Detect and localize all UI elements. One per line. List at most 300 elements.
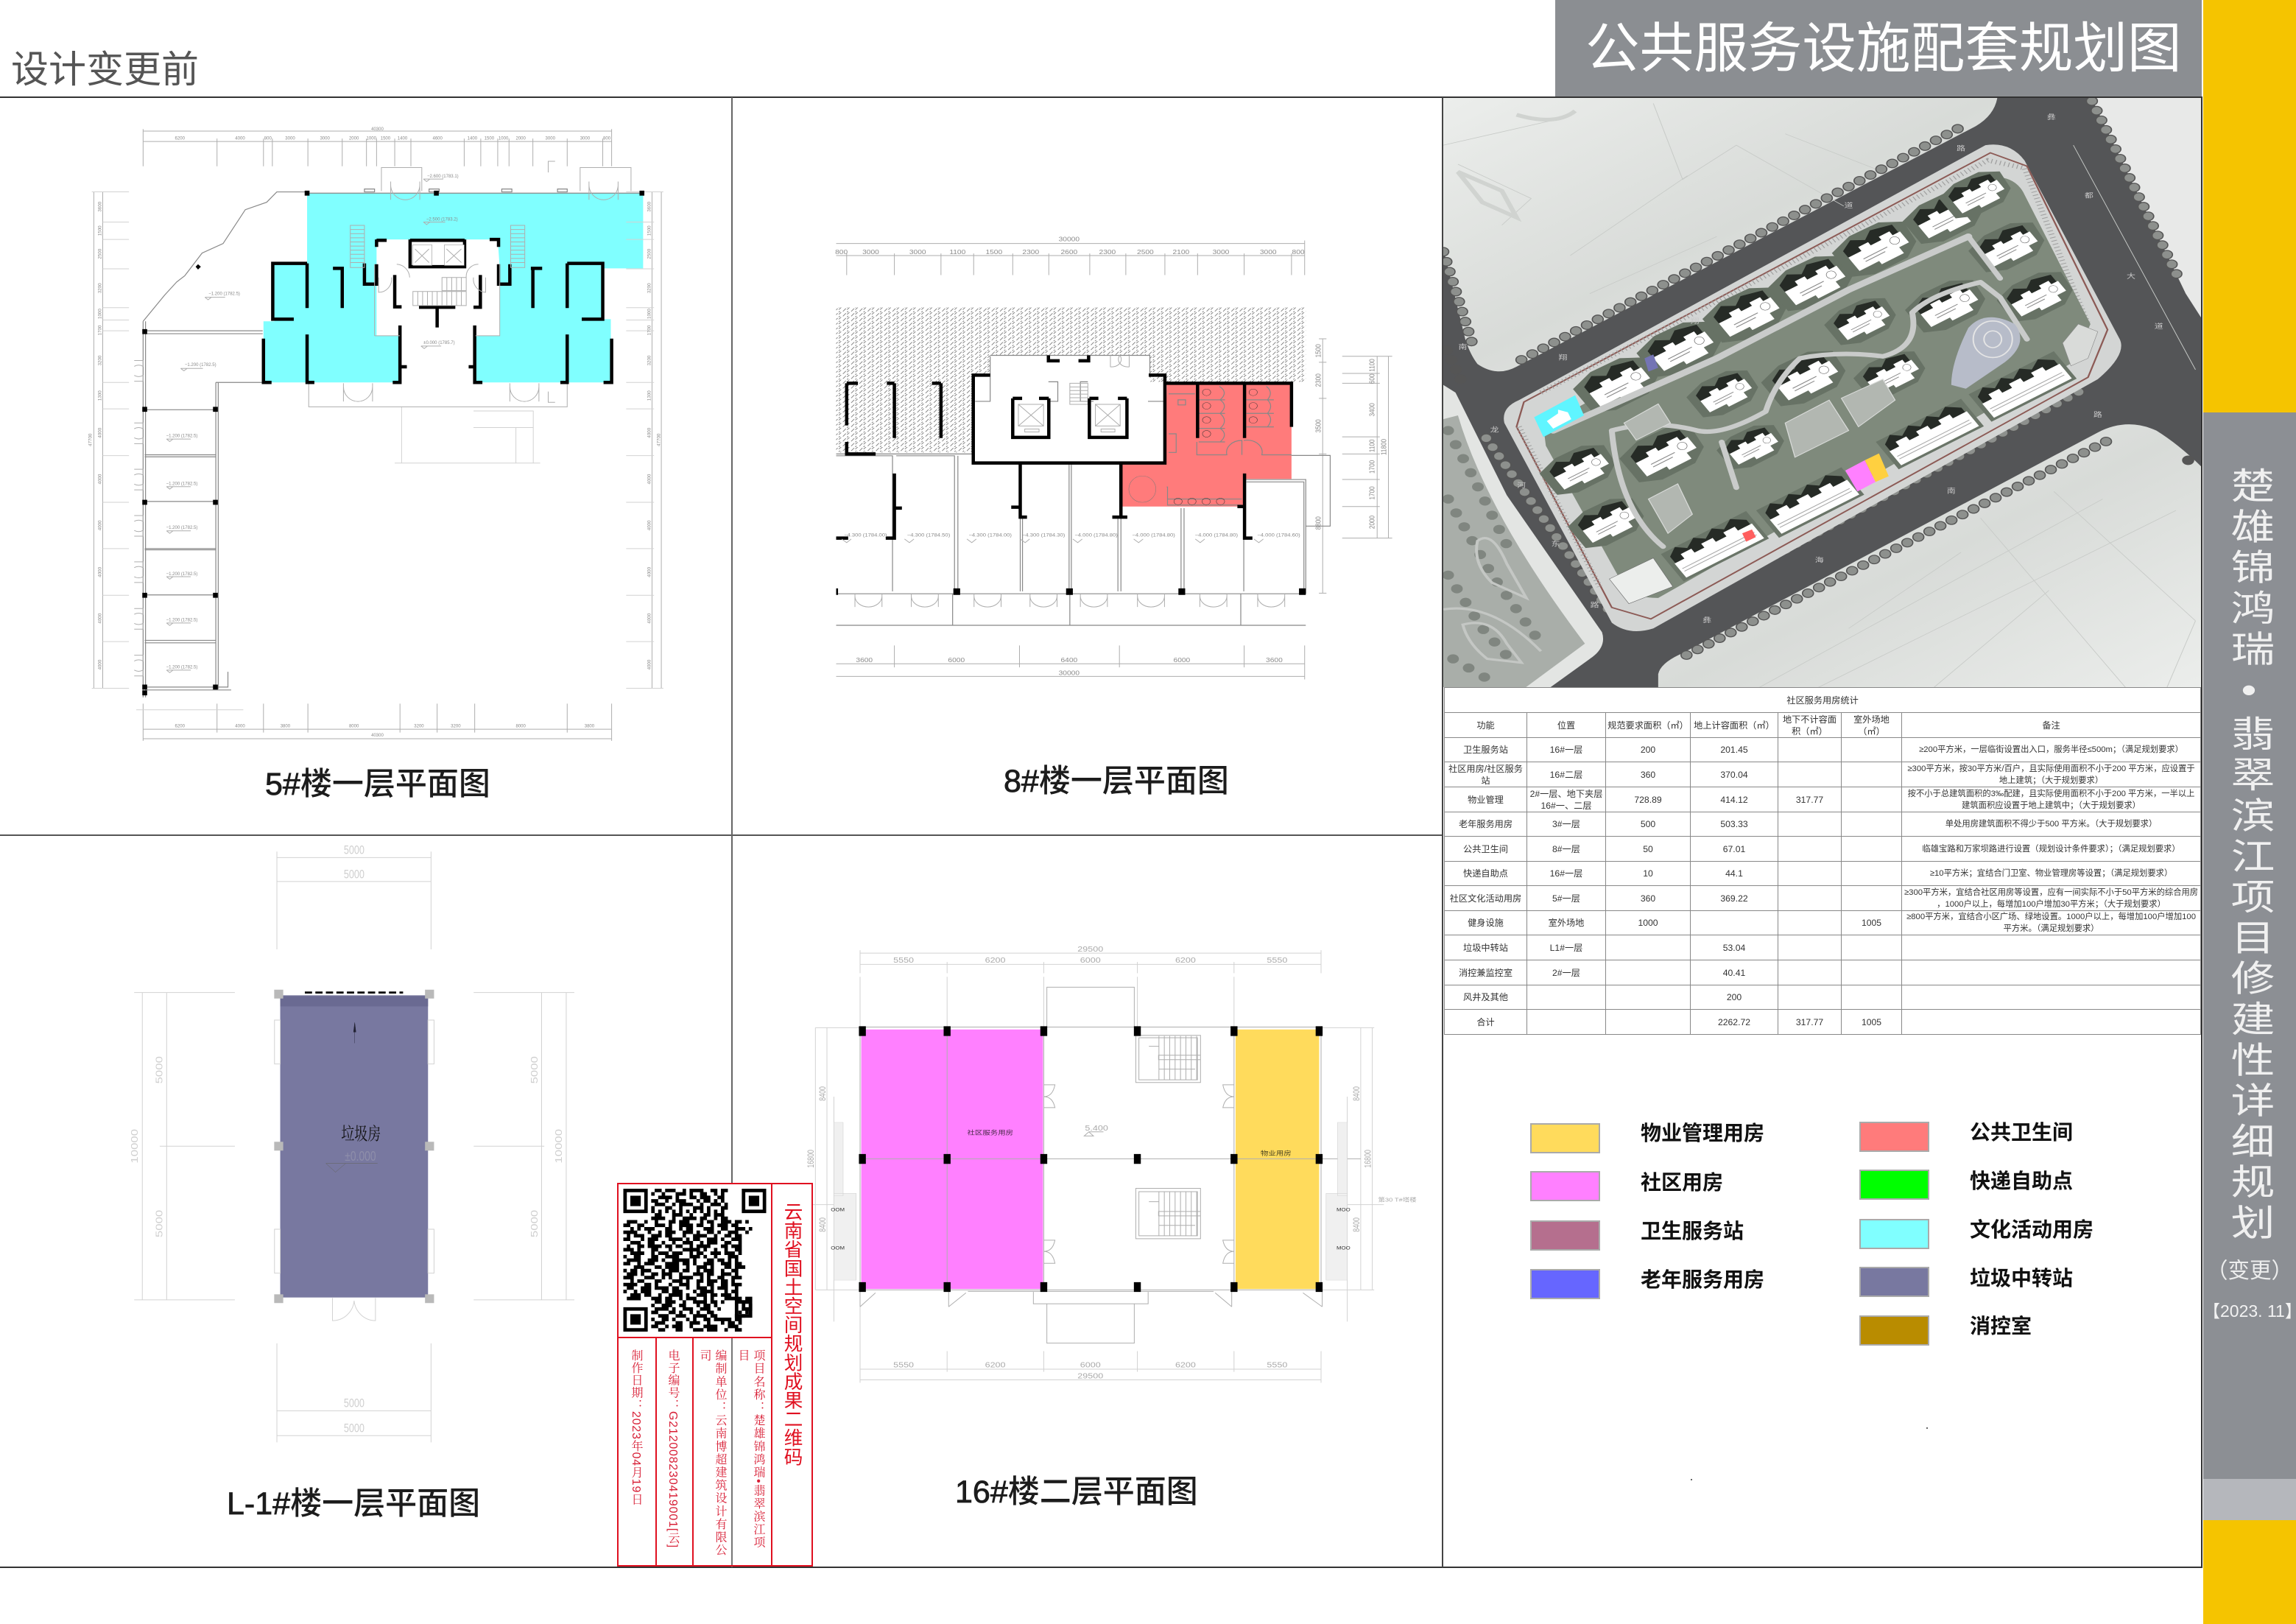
elevation labels: −1.200 (1782.5) xyxy=(166,665,197,670)
dimensions: 2100 xyxy=(1173,249,1189,256)
caption: building 5: 5#楼一层平面图 xyxy=(265,767,490,802)
dimensions: 1300 xyxy=(647,390,652,401)
dimensions: 2000 xyxy=(1368,516,1376,529)
table: community service room statistics: 8#一层 xyxy=(1552,844,1580,854)
table: community service room statistics: 500 xyxy=(1641,819,1655,829)
dimensions: 6000 xyxy=(1080,957,1101,965)
hatched area xyxy=(837,307,1306,452)
dimensions: 800 xyxy=(1292,249,1305,256)
dimensions: 3200 xyxy=(647,283,652,293)
room labels xyxy=(967,1129,1292,1156)
elevation labels: −1.200 (1782.5) xyxy=(166,572,197,577)
swatch: culture rooms xyxy=(1859,1219,1929,1249)
dimensions xyxy=(835,236,1392,680)
QR code xyxy=(623,1189,766,1332)
caption: building 16: 16#楼二层平面图 xyxy=(955,1474,1198,1510)
dimensions: 3800 xyxy=(585,723,595,728)
dimension lines: 5000 xyxy=(530,1056,540,1083)
dimension lines: 5000 xyxy=(155,1056,165,1083)
table: community service room statistics: 44.1 xyxy=(1725,868,1743,879)
dimensions: 600 xyxy=(1368,373,1376,384)
dimensions: 4000 xyxy=(97,613,102,624)
table: community service room statistics: 2#一层 xyxy=(1552,968,1580,978)
dimensions: 2600 xyxy=(1060,249,1077,256)
dimensions: 8000 xyxy=(349,723,359,728)
dimensions: 5550 xyxy=(893,957,914,965)
dimension lines: 5000 xyxy=(344,1397,365,1410)
table: community service room statistics: 1005 xyxy=(1862,1016,1881,1027)
dimensions: 3500 xyxy=(1314,419,1323,432)
elevation labels xyxy=(842,533,1300,543)
outlines, stairs, doors: MOO xyxy=(1337,1208,1351,1212)
table: community service room statistics: 备注 xyxy=(2042,720,2060,731)
dimensions: 3200 xyxy=(97,355,102,365)
dimensions: 800 xyxy=(835,249,848,256)
dimensions xyxy=(807,946,1417,1383)
elevation labels: −2.500 (1783.2) xyxy=(426,217,458,222)
road name labels: 彝 xyxy=(2047,113,2056,122)
dimensions: 1700 xyxy=(1368,486,1376,499)
central plaza xyxy=(1951,317,2021,389)
site block xyxy=(1504,144,2121,631)
table: community service room statistics: 50 xyxy=(1643,844,1653,854)
panel: building 16 second floor plan xyxy=(807,946,1417,1510)
compiling unit: 编制单位：云南博超建筑设计有限公司 xyxy=(698,1349,726,1557)
road name labels: 翔 xyxy=(1691,317,1700,326)
elevation labels: −4.000 (1784.60) xyxy=(1257,533,1300,538)
table: community service room statistics: 合计 xyxy=(1476,1016,1495,1027)
elevation labels: −1.200 (1782.5) xyxy=(208,291,240,296)
table: community service room statistics: 369.22 xyxy=(1720,893,1748,903)
table: community service room statistics: 370.04 xyxy=(1720,769,1748,779)
table: community service room statistics: ≥800平方米，宜结合小区广场、绿地设置。1000户以上，每增加100户增加100 xyxy=(1906,913,2196,921)
title banner xyxy=(1555,0,2202,96)
label: health station: 卫生服务站 xyxy=(1641,1220,1744,1242)
label: property management: 物业管理用房 xyxy=(1641,1122,1764,1145)
drawing: building 5 plan xyxy=(88,127,663,741)
cyan culture activity rooms xyxy=(264,193,643,382)
elevation labels: −4.000 (1784.80) xyxy=(1132,533,1175,538)
swatch: garbage transfer xyxy=(1859,1267,1929,1297)
table: community service room statistics: 积（㎡） xyxy=(1792,726,1828,737)
table: community service room statistics: （㎡） xyxy=(1858,726,1885,737)
room labels: 物业用房 xyxy=(1261,1150,1292,1156)
elevation labels xyxy=(166,174,459,672)
dimensions: 6200 xyxy=(985,957,1006,965)
table: community service room statistics: 站 xyxy=(1481,775,1490,785)
dimensions: 3000 xyxy=(1213,249,1229,256)
outlines, stairs, doors: OOM xyxy=(831,1246,845,1251)
table: community service room statistics: 快递自助点 xyxy=(1463,868,1508,879)
table: community service room statistics: 平方米。（满足规划要求） xyxy=(2004,924,2099,933)
caption: L-1: L-1#楼一层平面图 xyxy=(227,1486,480,1522)
thin outlines and shops wing xyxy=(134,161,643,710)
production date: 制作日期：2023年04月19日 xyxy=(630,1349,642,1505)
outlines, stairs, doors: 5.400 xyxy=(1085,1125,1108,1133)
label: elderly services: 老年服务用房 xyxy=(1641,1268,1764,1291)
table: community service room statistics: 53.04 xyxy=(1723,943,1745,953)
room labels: 社区服务用房 xyxy=(967,1129,1013,1136)
table: community service room statistics: 风井及其他 xyxy=(1463,992,1508,1002)
dimensions: 3200 xyxy=(414,723,424,728)
dimensions: 3000 xyxy=(546,136,556,141)
dimensions: 11800 xyxy=(1380,439,1388,455)
caption: building 8: 8#楼一层平面图 xyxy=(1004,764,1229,799)
dimensions: 8400 xyxy=(819,1086,828,1101)
roads xyxy=(1443,96,2209,692)
dimension lines xyxy=(130,844,574,1442)
legend xyxy=(1530,1121,2093,1346)
elevation labels: −1.200 (1782.5) xyxy=(166,525,197,530)
dimensions: 2500 xyxy=(1137,249,1154,256)
table: community service room statistics: 200 xyxy=(1641,745,1655,755)
label: parcel point: 快递自助点 xyxy=(1970,1170,2073,1192)
table: community service room statistics: 16#一层 xyxy=(1550,745,1582,755)
dimensions: 1100 xyxy=(1368,440,1376,452)
central terraces xyxy=(1624,379,1895,533)
dimension lines: 5000 xyxy=(344,844,365,857)
QR code certificate block xyxy=(617,1183,813,1567)
dimensions: 4000 xyxy=(97,520,102,530)
swatch: elderly services xyxy=(1530,1269,1600,1299)
dimensions: 5550 xyxy=(1267,957,1287,965)
dimensions: 1500 xyxy=(381,136,391,141)
yellow property management rooms xyxy=(1236,1030,1319,1289)
panel: site aerial plan xyxy=(1443,98,2201,687)
dimensions: 6200 xyxy=(1175,1362,1196,1369)
label: garbage transfer: 垃圾中转站 xyxy=(1970,1267,2073,1290)
dimensions: 1500 xyxy=(985,249,1002,256)
dimensions: 1400 xyxy=(468,136,478,141)
dimensions: 4000 xyxy=(647,613,652,624)
dimensions: 16800 xyxy=(1364,1150,1373,1168)
dimensions: 6200 xyxy=(985,1362,1006,1369)
dimensions: 800 xyxy=(603,136,611,141)
side bar light strip xyxy=(2203,1479,2296,1520)
dimensions: 3000 xyxy=(580,136,591,141)
road name labels: 路 xyxy=(1591,601,1599,609)
table: community service room statistics: 40.41 xyxy=(1723,968,1745,978)
elevation labels: −4.000 (1784.80) xyxy=(1074,533,1118,538)
dimensions: 6400 xyxy=(1060,657,1077,664)
purple garbage room xyxy=(281,995,428,1298)
side bar grey panel xyxy=(2203,412,2296,1479)
dimensions: 4000 xyxy=(647,659,652,669)
road name labels: 翔 xyxy=(1559,354,1567,362)
dimensions: 3000 xyxy=(1260,249,1277,256)
dimensions: 4000 xyxy=(647,566,652,577)
elevation labels: −1.200 (1782.5) xyxy=(166,433,197,438)
table: community service room statistics: 建筑面积应设置于地上建筑中；（大于规划要求） xyxy=(1962,801,2141,810)
dimensions: 3400 xyxy=(1368,403,1376,416)
dimensions: 第30 T#塔楼 xyxy=(1378,1197,1417,1203)
swatch: public toilet xyxy=(1859,1122,1929,1152)
road name labels: 东 xyxy=(1552,540,1560,548)
dimensions: 5550 xyxy=(893,1362,914,1369)
dimensions: 1500 xyxy=(485,136,495,141)
label: community: 社区用房 xyxy=(1641,1171,1723,1194)
label: public toilet: 公共卫生间 xyxy=(1970,1121,2073,1144)
dimensions: 2500 xyxy=(647,248,652,259)
dimensions: 4600 xyxy=(432,136,443,141)
park trees and paths xyxy=(1443,431,1541,682)
dimensions: 6000 xyxy=(1174,657,1190,664)
small specks xyxy=(1926,1427,1928,1429)
dimensions: 1000 xyxy=(367,136,377,141)
dimensions: 8400 xyxy=(819,1217,828,1232)
project name: 项目名称：楚雄锦鸿瑞•翡翠滨江项目 xyxy=(736,1349,764,1549)
road name labels: 龙 xyxy=(1490,426,1499,434)
drawing: building 8 plan xyxy=(835,236,1392,679)
dimensions: 2500 xyxy=(97,248,102,259)
dimension lines: 5000 xyxy=(344,868,365,882)
aerial master plan xyxy=(1443,98,2201,687)
dimensions: 3000 xyxy=(285,136,295,141)
dimensions: 4000 xyxy=(647,474,652,484)
table: community service room statistics: ≥200平方米，一层临街设置出入口，服务半径≤500m；（满足规划要求） xyxy=(1919,745,2183,754)
dimensions: 4000 xyxy=(97,566,102,577)
table: community service room statistics: 地下不计容面 xyxy=(1783,714,1837,725)
table: community service room statistics: 地上建筑；（大于规划要求） xyxy=(1999,776,2103,785)
elevation labels: −1.200 (1782.5) xyxy=(166,618,197,623)
drawing: building 16 plan xyxy=(807,946,1417,1383)
dimension lines: 5000 xyxy=(155,1210,165,1237)
dimensions: 29500 xyxy=(1077,1373,1103,1380)
dimensions: 1700 xyxy=(97,325,102,335)
table: community service room statistics: 社区服务用房统计 xyxy=(1786,695,1859,706)
panel: building 8 ground floor plan xyxy=(835,236,1392,799)
project name vertical text: 楚雄锦鸿瑞•翡翠滨江项目修建性详细规划 xyxy=(2225,467,2273,1245)
dimensions: 1100 xyxy=(1368,359,1376,372)
QR cell border xyxy=(619,1184,772,1338)
table: community service room statistics: 社区用房/社区服务 xyxy=(1448,763,1523,773)
dimensions: 1700 xyxy=(1368,460,1376,474)
elevation labels: ±0.000 (1785.7) xyxy=(423,340,455,345)
dimensions: 4000 xyxy=(97,659,102,669)
table: community service room statistics: 2262.72 xyxy=(1718,1016,1750,1027)
residential buildings xyxy=(1535,164,2098,604)
dimensions: 1000 xyxy=(499,136,509,141)
dimensions: 1000 xyxy=(97,309,102,319)
road name labels: 都 xyxy=(2085,192,2093,200)
dimensions: 3000 xyxy=(320,136,330,141)
swatch: community xyxy=(1530,1171,1600,1201)
table: community service room statistics: 503.33 xyxy=(1720,819,1748,829)
table: community service room statistics: ≥10平方米；宜结合门卫室、物业管理房等设置；（满足规划要求） xyxy=(1930,869,2172,878)
dimensions: 30000 xyxy=(1059,669,1080,676)
surrounding land xyxy=(1443,96,2205,692)
tree rows along roads xyxy=(1443,101,2191,655)
outlines, stairs, doors xyxy=(831,987,1351,1343)
dimensions: 2300 xyxy=(1099,249,1116,256)
red public toilet xyxy=(1121,383,1292,507)
internal roads xyxy=(1553,236,2027,546)
heavy walls and elevators xyxy=(837,355,1306,595)
dimensions: 4000 xyxy=(235,723,245,728)
dimensions: 5550 xyxy=(1267,1362,1287,1369)
table: community service room statistics: 功能 xyxy=(1476,720,1495,731)
table: community service room statistics: 200 xyxy=(1727,992,1742,1002)
elevation labels: −2.600 (1783.1) xyxy=(427,174,459,179)
road name labels: 路 xyxy=(2093,410,2102,419)
elevation labels: −4.300 (1784.00) xyxy=(968,533,1012,538)
dimensions: 3600 xyxy=(856,657,873,664)
table: community service room statistics: 健身设施 xyxy=(1468,918,1504,928)
table: community service room statistics: ≥300平方米，按30平方米/百户，且实际使用面积不小于200 平方米，应设置于 xyxy=(1907,764,2195,773)
elevation: ±0.000 xyxy=(345,1149,376,1164)
dimensions: 6200 xyxy=(175,723,186,728)
dimensions: 47700 xyxy=(656,433,661,446)
table: community service room statistics: 317.77 xyxy=(1796,794,1823,804)
shops and doors xyxy=(837,355,1330,625)
dimensions: 3200 xyxy=(97,283,102,293)
dimensions: 47700 xyxy=(88,433,94,446)
table: community service room statistics: 317.77 xyxy=(1796,1016,1823,1027)
dimensions: 40300 xyxy=(371,127,384,132)
dimensions: 3200 xyxy=(647,355,652,365)
dimensions: 3600 xyxy=(647,201,652,212)
dimension lines: 5000 xyxy=(344,1422,365,1435)
magenta community rooms xyxy=(862,1030,1043,1289)
table: community service room statistics: 按不小于总建筑面积的3‰配建，且实际使用面积不小于200 平方米，一半以上 xyxy=(1908,790,2194,798)
swatch: fire control xyxy=(1859,1315,1929,1346)
table: community service room statistics: 室外场地 xyxy=(1853,714,1890,725)
table: community service room statistics: 728.89 xyxy=(1634,794,1662,804)
elevation labels: −4.300 (1784.30) xyxy=(1022,533,1065,538)
dimensions: 1400 xyxy=(398,136,408,141)
road name labels: 河 xyxy=(1517,482,1526,490)
table: community service room statistics: 201.45 xyxy=(1720,745,1748,755)
dimensions: 4000 xyxy=(647,520,652,530)
dimensions: 16800 xyxy=(807,1150,817,1168)
dimensions xyxy=(88,127,663,741)
dimensions: 2000 xyxy=(349,136,359,141)
dimensions: 1500 xyxy=(97,225,102,236)
elevation labels: −4.300 (1784.50) xyxy=(907,533,950,538)
table: community service room statistics: 5#一层 xyxy=(1552,893,1580,903)
table: community service room statistics: 老年服务用房 xyxy=(1459,819,1513,829)
dimensions: 2300 xyxy=(1314,373,1323,387)
dimensions: 8800 xyxy=(1314,516,1323,530)
dimensions: 40300 xyxy=(371,733,384,738)
swatch: health station xyxy=(1530,1220,1600,1251)
dimensions: 6200 xyxy=(1175,957,1196,965)
dimensions: 6200 xyxy=(175,136,186,141)
table: community service room statistics: 1000 xyxy=(1638,918,1658,928)
frame lines xyxy=(0,96,2202,98)
columns xyxy=(859,1026,1323,1292)
dimensions: 6000 xyxy=(1080,1362,1101,1369)
dimensions: 3200 xyxy=(451,723,461,728)
heavy walls and columns xyxy=(142,191,644,695)
dimensions: 3000 xyxy=(909,249,926,256)
change note: （变更） xyxy=(2206,1259,2293,1283)
label: culture rooms: 文化活动用房 xyxy=(1970,1218,2093,1241)
table: community service room statistics: 消控兼监控室 xyxy=(1459,968,1513,978)
core: stairs and elevators xyxy=(351,225,525,336)
dimensions: 1300 xyxy=(97,390,102,401)
swatch: property management xyxy=(1530,1123,1600,1153)
dimensions: 800 xyxy=(264,136,272,141)
dimensions: 6000 xyxy=(948,657,965,664)
road name labels: 路 xyxy=(1957,144,1965,152)
table: community service room statistics: 地上计容面积（㎡） xyxy=(1694,720,1775,731)
plaza rings xyxy=(1973,321,2012,357)
table: community service room statistics: 16#二层 xyxy=(1550,769,1582,779)
table: community service room statistics: 3#一层 xyxy=(1552,819,1580,829)
road name labels: 南 xyxy=(1947,487,1956,495)
highlighted service rooms xyxy=(1534,354,1889,541)
road name labels: 道 xyxy=(1845,201,1853,209)
table: community service room statistics: 414.12 xyxy=(1720,794,1748,804)
elevation labels: −4.300 (1784.00) xyxy=(844,533,887,538)
road name labels xyxy=(1459,113,2163,625)
table: community service room statistics: 垃圾中转站 xyxy=(1463,943,1508,953)
elevation labels: −1.200 (1782.5) xyxy=(185,362,216,368)
table: community service room statistics: 360 xyxy=(1641,893,1655,903)
dimensions: 4000 xyxy=(97,474,102,484)
table: community service room statistics: 室外场地 xyxy=(1549,918,1584,928)
dimension lines: 10000 xyxy=(554,1129,565,1164)
elevation labels: −1.200 (1782.5) xyxy=(166,481,197,486)
table: community service room statistics: 10 xyxy=(1643,868,1653,879)
outlines, stairs, doors: MOO xyxy=(1337,1246,1351,1251)
walls, windows, columns xyxy=(274,990,434,1321)
table: community service room statistics: 公共卫生间 xyxy=(1463,844,1508,854)
dimensions: 3600 xyxy=(97,201,102,212)
table: community service room statistics: 16#一、二层 xyxy=(1540,800,1592,810)
table: community service room statistics: 67.01 xyxy=(1723,844,1745,854)
dimensions: 1000 xyxy=(647,309,652,319)
road name labels: 道 xyxy=(2155,322,2163,331)
road name labels: 彝 xyxy=(1702,616,1711,625)
table: community service room statistics: 1005 xyxy=(1862,918,1881,928)
dimensions: 1500 xyxy=(1314,344,1323,357)
dimension lines: 10000 xyxy=(130,1129,141,1164)
dimensions: 1100 xyxy=(949,249,965,256)
label: fire control: 消控室 xyxy=(1970,1315,2032,1337)
table: community service room statistics: 位置 xyxy=(1557,720,1575,731)
road name labels: 大 xyxy=(2127,272,2135,281)
road name labels: 海 xyxy=(1815,556,1824,564)
table: community service room statistics: 360 xyxy=(1641,769,1655,779)
dimensions: 2300 xyxy=(1022,249,1039,256)
dimensions: 3600 xyxy=(1266,657,1283,664)
dimension lines: 5000 xyxy=(530,1210,540,1237)
table: community service room statistics: ，1000户以上，每增加100户增加30平方米；（大于规划要求） xyxy=(1937,900,2166,909)
table: community service room statistics: 社区文化活动用房 xyxy=(1450,893,1521,903)
table: community service room statistics xyxy=(1444,687,2201,1035)
dimensions: 29500 xyxy=(1077,946,1103,954)
panel: L-1 ground floor plan xyxy=(130,844,574,1522)
title text: 公共服务设施配套规划图 xyxy=(1585,18,2182,79)
dimensions: 4000 xyxy=(647,427,652,438)
dimensions: 1700 xyxy=(647,325,652,335)
road name labels: 南 xyxy=(1459,342,1468,351)
table: community service room statistics: 16#一层 xyxy=(1550,868,1582,879)
drawing: L-1 plan xyxy=(130,844,574,1442)
dimensions: 8000 xyxy=(515,723,526,728)
certificate title vertical: 云南省国土空间规划成果二维码 xyxy=(781,1202,802,1466)
table: community service room statistics: 规范要求面积（㎡） xyxy=(1607,720,1688,731)
dimensions: 2000 xyxy=(515,136,526,141)
table: community service room statistics: 2#一层、地下夹层 xyxy=(1530,788,1602,798)
dimensions: 1500 xyxy=(647,225,652,236)
table: community service room statistics: 物业管理 xyxy=(1468,794,1504,804)
right side bar xyxy=(2203,0,2296,1624)
dimensions: 30000 xyxy=(1059,236,1080,243)
dimensions: 8400 xyxy=(1353,1086,1362,1101)
